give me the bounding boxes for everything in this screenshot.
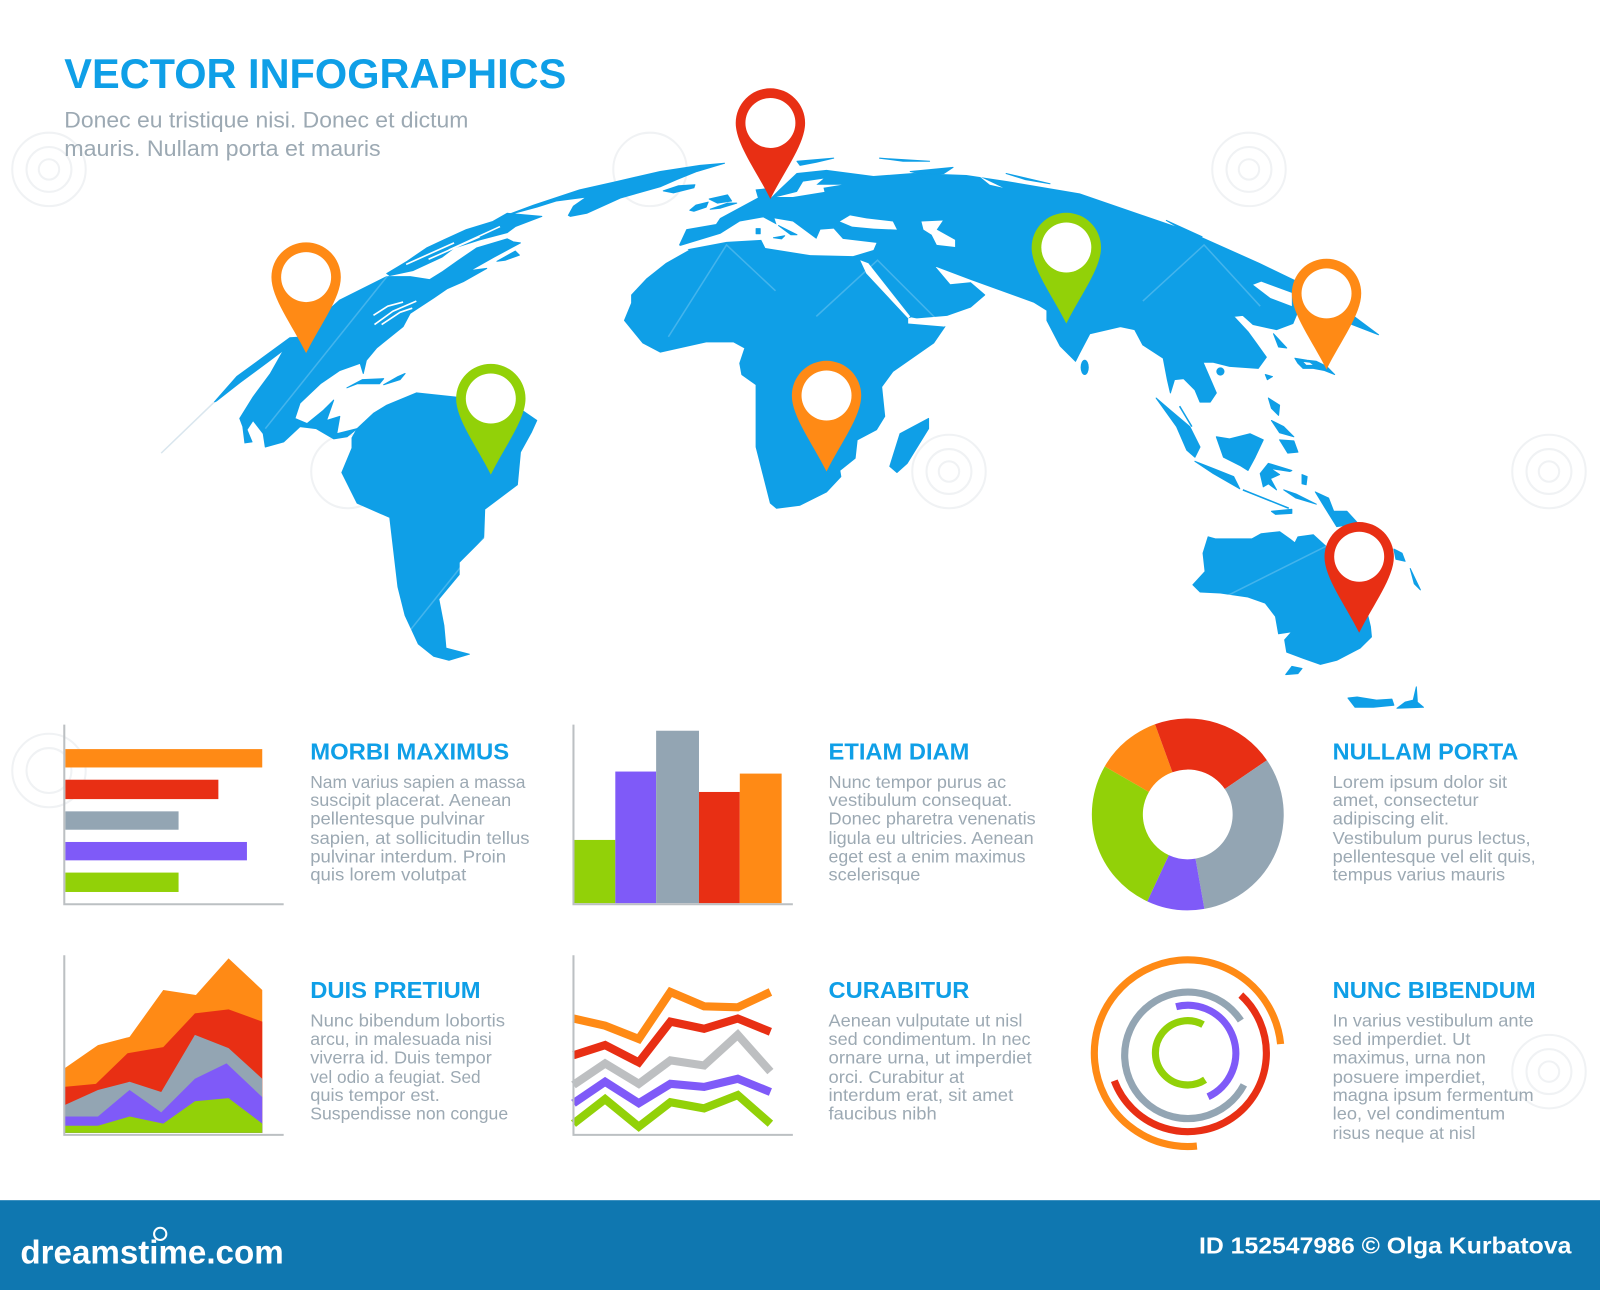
- text: Morbi Maximus: pellentesque pulvinar: [310, 809, 485, 829]
- text: Nunc Bibendum: maximus, urna non: [1333, 1047, 1486, 1067]
- text: Curabitur: orci. Curabitur at: [829, 1067, 964, 1087]
- text: Nunc Bibendum: NUNC BIBENDUM: [1333, 977, 1536, 1003]
- radial arc chart: [1094, 960, 1281, 1147]
- text: Morbi Maximus: [310, 738, 530, 885]
- map: Italy and Mediterranean islands: [756, 226, 797, 239]
- donut chart: [1092, 719, 1284, 910]
- text: Curabitur: Aenean vulputate ut nisl: [829, 1011, 1022, 1031]
- map: Eurasia and Africa: [624, 170, 1379, 508]
- map: faint grid lines: [265, 245, 1337, 633]
- world map: [161, 158, 1423, 708]
- text: Nullam Porta: tempus varius mauris: [1333, 865, 1505, 885]
- text: Duis Pretium: arcu, in malesuada nisi: [310, 1029, 492, 1049]
- map: New Zealand: [1348, 687, 1423, 708]
- map: Russian arctic islands: [797, 158, 1202, 237]
- map: Australia: [1193, 532, 1371, 664]
- text: Morbi Maximus: sapien, at sollicitudin tellus: [310, 828, 530, 848]
- text: Duis Pretium: Suspendisse non congue: [310, 1104, 508, 1124]
- text: Duis Pretium: vel odio a feugiat. Sed: [310, 1067, 481, 1087]
- footer credit: ID 152547986 © Olga Kurbatova: [1199, 1232, 1572, 1258]
- text: Nullam Porta: Lorem ipsum dolor sit: [1333, 772, 1507, 792]
- pin: orange north america: [271, 242, 341, 353]
- text: Etiam Diam: Nunc tempor purus ac: [829, 772, 1006, 792]
- text: Nunc Bibendum: [1333, 977, 1536, 1143]
- text: Nullam Porta: pellentesque vel elit quis,: [1333, 846, 1536, 866]
- pin: green south america: [456, 364, 526, 475]
- footer band: [0, 1200, 1600, 1290]
- text: Duis Pretium: [310, 977, 508, 1124]
- text: Nunc Bibendum: risus neque at nisl: [1333, 1123, 1476, 1143]
- map: Greenland: [506, 163, 724, 216]
- text: Duis Pretium: Nunc bibendum lobortis: [310, 1011, 505, 1031]
- horizontal bar chart: [64, 725, 284, 904]
- text: Nullam Porta: [1333, 738, 1536, 885]
- text: Curabitur: CURABITUR: [829, 977, 969, 1003]
- text: Curabitur: sed condimentum. In nec: [829, 1029, 1031, 1049]
- line chart: [573, 955, 793, 1135]
- text: Nunc Bibendum: In varius vestibulum ante: [1333, 1011, 1534, 1031]
- text: Nunc Bibendum: leo, vel condimentum: [1333, 1104, 1505, 1124]
- map: New Caledonia and Pacific islands: [1394, 549, 1420, 590]
- map: Southeast Asia islands: [1081, 360, 1358, 527]
- text: Duis Pretium: viverra id. Duis tempor: [310, 1047, 492, 1067]
- column chart: [573, 725, 793, 904]
- subtitle text: Donec eu tristique nisi. Donec et dictum: [64, 108, 468, 133]
- text: Etiam Diam: Donec pharetra venenatis: [829, 809, 1036, 829]
- map: seas on Eurasia and Africa: [673, 177, 1292, 327]
- map: North America: [240, 239, 520, 447]
- map: Madagascar: [890, 418, 929, 473]
- text: Nullam Porta: amet, consectetur: [1333, 790, 1479, 810]
- text: Nullam Porta: adipiscing elit.: [1333, 809, 1449, 829]
- text: Etiam Diam: vestibulum consequat.: [829, 790, 1012, 810]
- text: Etiam Diam: scelerisque: [829, 865, 920, 885]
- map: faint tail: [161, 402, 214, 453]
- pin: orange east asia: [1292, 259, 1361, 369]
- text: Duis Pretium: quis tempor est.: [310, 1085, 440, 1105]
- map: Korea: [1273, 334, 1287, 348]
- map: North Atlantic islands: [663, 185, 770, 211]
- text: Duis Pretium: DUIS PRETIUM: [310, 977, 481, 1003]
- pin: orange africa: [792, 361, 861, 472]
- stacked area chart: [64, 955, 284, 1135]
- text: Curabitur: faucibus nibh: [829, 1104, 937, 1124]
- text: Etiam Diam: ligula eu ultricies. Aenean: [829, 828, 1034, 848]
- subtitle text: mauris. Nullam porta et mauris: [64, 136, 381, 161]
- map: arctic and Hudson gaps: [373, 227, 500, 325]
- text: Etiam Diam: ETIAM DIAM: [829, 738, 969, 764]
- pin: green asia: [1032, 213, 1101, 324]
- text: Nunc Bibendum: posuere imperdiet,: [1333, 1067, 1486, 1087]
- map: Canadian arctic islands: [347, 213, 542, 388]
- text: Curabitur: interdum erat, sit amet: [829, 1085, 1013, 1105]
- map: South America: [342, 393, 537, 660]
- text: Morbi Maximus: quis lorem volutpat: [310, 865, 467, 885]
- text: Etiam Diam: [829, 738, 1036, 885]
- text: Curabitur: [829, 977, 1032, 1124]
- text: Nullam Porta: Vestibulum purus lectus,: [1333, 828, 1531, 848]
- text: Nunc Bibendum: sed imperdiet. Ut: [1333, 1029, 1471, 1049]
- text: Nullam Porta: NULLAM PORTA: [1333, 738, 1518, 764]
- text: Etiam Diam: eget est a enim maximus: [829, 846, 1026, 866]
- text: Morbi Maximus: MORBI MAXIMUS: [310, 738, 509, 764]
- title: VECTOR INFOGRAPHICS: [64, 50, 566, 97]
- text: Morbi Maximus: pulvinar interdum. Proin: [310, 846, 506, 866]
- pin: red australia: [1324, 522, 1394, 633]
- map: Alaska sliver: [214, 337, 306, 402]
- text: Nunc Bibendum: magna ipsum fermentum: [1333, 1085, 1534, 1105]
- text: Curabitur: ornare urna, ut imperdiet: [829, 1047, 1032, 1067]
- map: Tasmania: [1286, 666, 1302, 675]
- text: Morbi Maximus: suscipit placerat. Aenean: [310, 790, 511, 810]
- pin: red europe: [736, 88, 805, 199]
- subtitle text: [64, 108, 468, 161]
- text: Morbi Maximus: Nam varius sapien a massa: [310, 772, 526, 792]
- map: Japan: [1295, 358, 1335, 375]
- footer logo: dreamstime.com: [20, 1234, 284, 1271]
